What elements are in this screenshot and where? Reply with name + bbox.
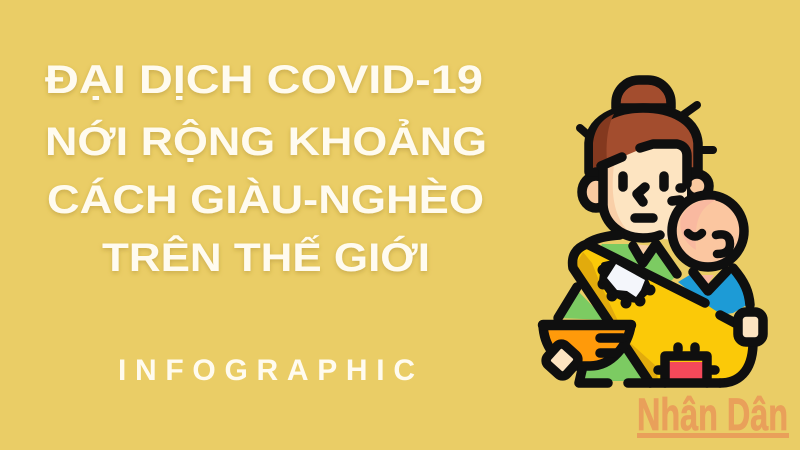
icon: ears xyxy=(582,174,709,208)
icon: hair bun xyxy=(616,80,671,108)
icon: hair xyxy=(589,108,698,172)
icon: red patch xyxy=(658,347,715,383)
icon: face xyxy=(601,144,687,240)
subtitle: INFOGRAPHIC xyxy=(118,354,415,387)
icon: bottom outline xyxy=(579,370,720,383)
title xyxy=(45,58,487,280)
title: CÁCH GIÀU-NGHÈO xyxy=(47,177,484,222)
icon: baby head xyxy=(672,195,744,267)
icon: mother's hand xyxy=(544,342,580,378)
icon: white clothing patch xyxy=(600,262,654,306)
title: TRÊN THẾ GIỚI xyxy=(102,234,430,280)
icon: orange bowl xyxy=(543,325,631,366)
icon: yellow baby sling xyxy=(558,244,753,383)
illustration: mother and baby xyxy=(543,80,763,383)
icon: stray hairs xyxy=(580,105,713,150)
title: NỚI RỘNG KHOẢNG xyxy=(45,118,487,164)
icon: baby's hand xyxy=(738,312,763,342)
icon: baby's blue clothes xyxy=(678,270,750,315)
icon: mother's green dress xyxy=(560,235,677,381)
title: ĐẠI DỊCH COVID-19 xyxy=(45,58,483,102)
